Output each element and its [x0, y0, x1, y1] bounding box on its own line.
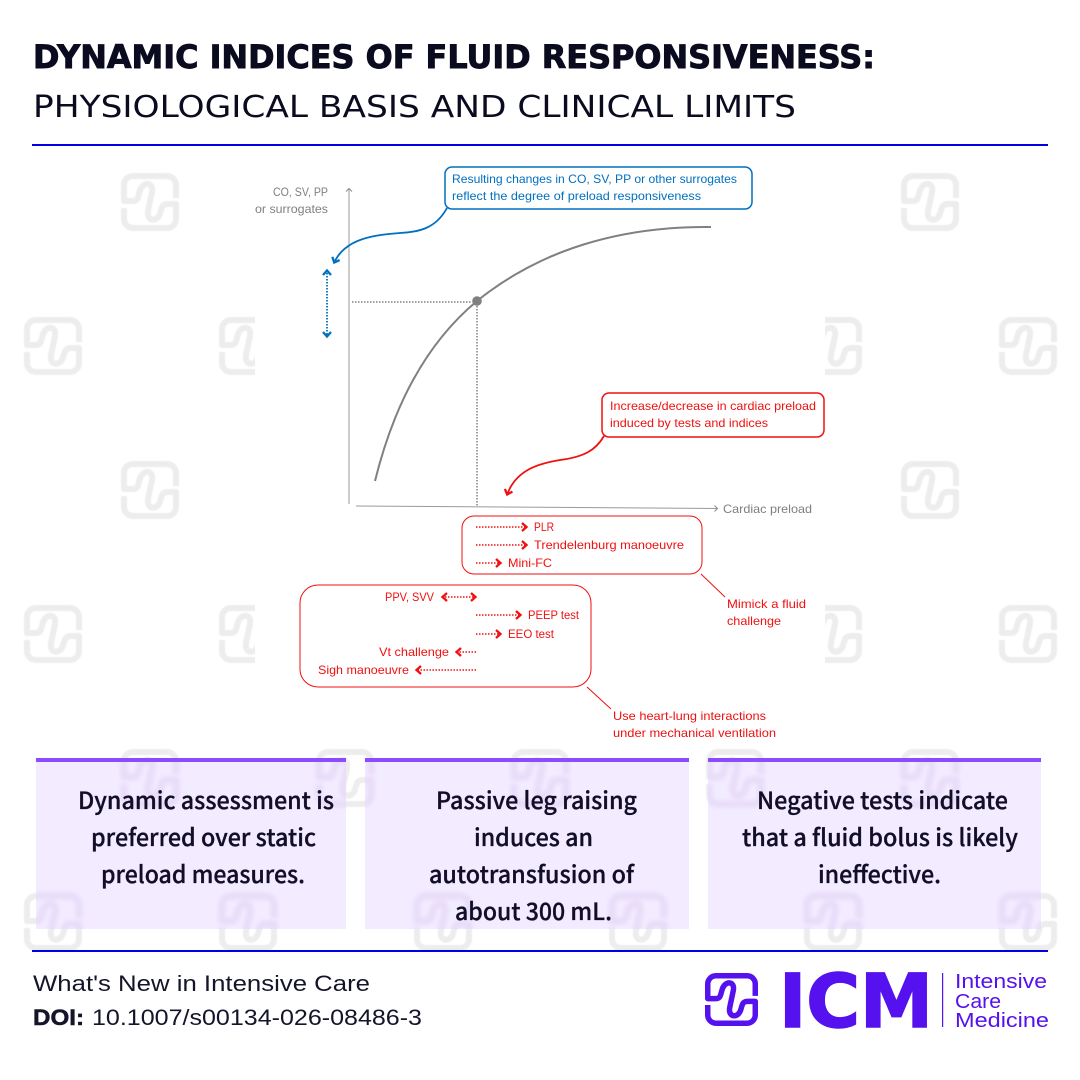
text: takeaway 2 [429, 781, 637, 927]
text: takeaway 1: preload measures. [101, 855, 305, 890]
text: takeaway 3 [742, 781, 1018, 890]
label: mimick a fluid challenge [701, 574, 806, 628]
title: DYNAMIC INDICES OF FLUID RESPONSIVENESS: [33, 38, 875, 76]
panel: mimick a fluid challenge tests: Mini-FC [508, 556, 552, 570]
red callout: induced by tests and indices [610, 416, 768, 430]
text: takeaway 1: preferred over static [91, 818, 316, 853]
text: takeaway 3: that a fluid bolus is likely [742, 818, 1018, 853]
label: heart-lung interactions: Use heart-lung interactions [613, 709, 766, 723]
red callout [602, 393, 824, 437]
blue callout [445, 167, 752, 209]
footer citation [33, 971, 422, 1030]
panel: heart-lung interaction tests: PEEP test [528, 608, 580, 622]
label: heart-lung interactions: under mechanical ventilation [613, 726, 776, 740]
icon: ICM mark [708, 976, 755, 1023]
panel: heart-lung interaction tests: Vt challenge [379, 645, 449, 659]
y axis: or surrogates [255, 202, 328, 216]
panel: mimick a fluid challenge tests: Trendelenburg manoeuvre [534, 538, 684, 552]
text: takeaway 2: about 300 mL. [455, 892, 612, 927]
text: takeaway 2: Passive leg raising [436, 781, 637, 816]
title [33, 38, 875, 125]
title: PHYSIOLOGICAL BASIS AND CLINICAL LIMITS [33, 90, 796, 125]
panel: Frank-Starling diagram [255, 160, 825, 746]
ICM logo: Care [955, 991, 1001, 1013]
panel: heart-lung interaction tests: Sigh manoeuvre [318, 663, 409, 677]
panel: card backgrounds [36, 758, 1041, 929]
text: takeaway 1 [78, 781, 334, 890]
panel: heart-lung interaction tests: PPV, SVV [385, 590, 434, 604]
text: takeaway 2: induces an [474, 818, 593, 853]
ICM logo: ICM [779, 959, 933, 1045]
y axis: CO, SV, PP [273, 185, 328, 199]
preload-response curve [352, 227, 711, 506]
ICM logo: Medicine [955, 1010, 1049, 1032]
arrow: red callout to preload axis [507, 436, 604, 495]
panel: heart-lung interaction tests [300, 585, 591, 687]
x axis: Cardiac preload [723, 502, 812, 516]
background watermark pattern [27, 176, 1054, 948]
label: heart-lung interactions [587, 687, 776, 740]
ICM logo: Intensive [955, 971, 1047, 993]
arrow: blue double-headed change [326, 270, 328, 337]
text: takeaway 2: autotransfusion of [429, 855, 636, 890]
label: mimick a fluid challenge: Mimick a fluid [727, 597, 806, 611]
panel: mimick a fluid challenge tests: PLR [534, 520, 554, 534]
panel: heart-lung interaction tests: EEO test [508, 627, 555, 641]
blue callout: reflect the degree of preload responsiveness [452, 189, 701, 203]
text: takeaway 1: Dynamic assessment is [78, 781, 334, 816]
blue callout: Resulting changes in CO, SV, PP or other surrogates [452, 172, 737, 186]
footer citation: DOI: [33, 1005, 84, 1030]
footer citation: What's New in Intensive Care [33, 971, 370, 996]
footer citation: 10.1007/s00134-026-08486-3 [92, 1005, 422, 1030]
text: takeaway 3: ineffective. [818, 855, 941, 890]
arrow: blue callout to y axis [334, 208, 447, 263]
label: mimick a fluid challenge: challenge [727, 614, 781, 628]
panel: mimick a fluid challenge tests [462, 516, 702, 574]
red callout: Increase/decrease in cardiac preload [610, 399, 816, 413]
ICM logo [708, 959, 1049, 1045]
y axis [255, 185, 349, 504]
text: takeaway 3: Negative tests indicate [757, 781, 1008, 816]
